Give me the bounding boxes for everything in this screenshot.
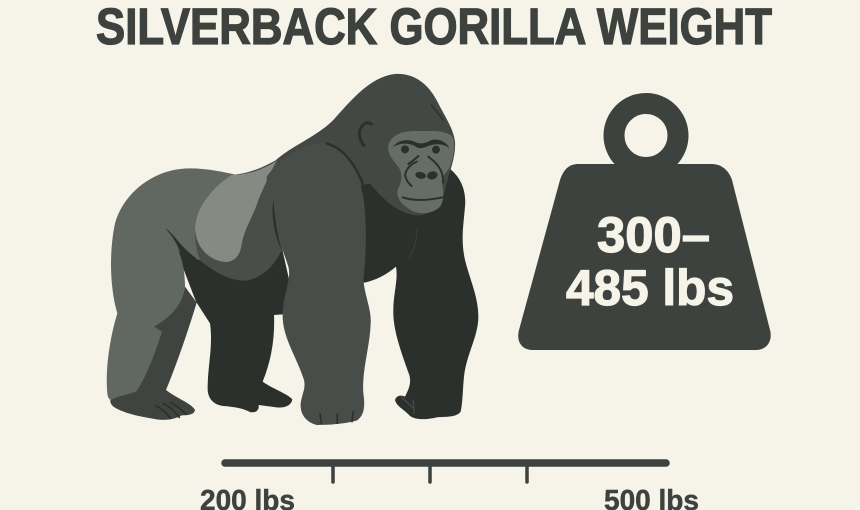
scale bar <box>225 459 666 467</box>
brows <box>393 139 449 148</box>
far hand detail <box>402 397 414 413</box>
second line: 485 lbs <box>566 260 734 316</box>
weight value <box>566 207 734 316</box>
face <box>388 131 454 213</box>
near front arm <box>267 143 371 425</box>
far hind leg and belly <box>165 228 297 412</box>
head and neck <box>277 74 455 215</box>
weight ring <box>614 104 678 168</box>
near hand finger lines <box>320 412 353 423</box>
chest line <box>408 230 417 258</box>
brow ridge shadow <box>432 105 443 120</box>
nostrils <box>415 171 427 180</box>
first line: 300– <box>597 207 710 263</box>
mouth <box>403 197 443 200</box>
torso and mid-tone back <box>165 153 307 281</box>
eyes <box>401 145 409 153</box>
shoulder crease <box>327 143 363 185</box>
ear <box>359 123 372 145</box>
nose and wrinkles <box>405 156 443 186</box>
arm crease <box>273 200 282 250</box>
weight body <box>518 164 771 350</box>
rear hip and thigh <box>107 168 237 400</box>
rear foot toe lines <box>156 403 186 418</box>
icon: weight <box>518 104 771 350</box>
illustration: silverback gorilla <box>107 74 478 425</box>
far arm and chest <box>333 160 478 419</box>
hip crease <box>165 228 197 273</box>
weight scale <box>200 463 699 510</box>
scale ticks <box>333 465 527 482</box>
silver saddle <box>195 161 277 262</box>
near hind lower leg <box>110 287 197 420</box>
